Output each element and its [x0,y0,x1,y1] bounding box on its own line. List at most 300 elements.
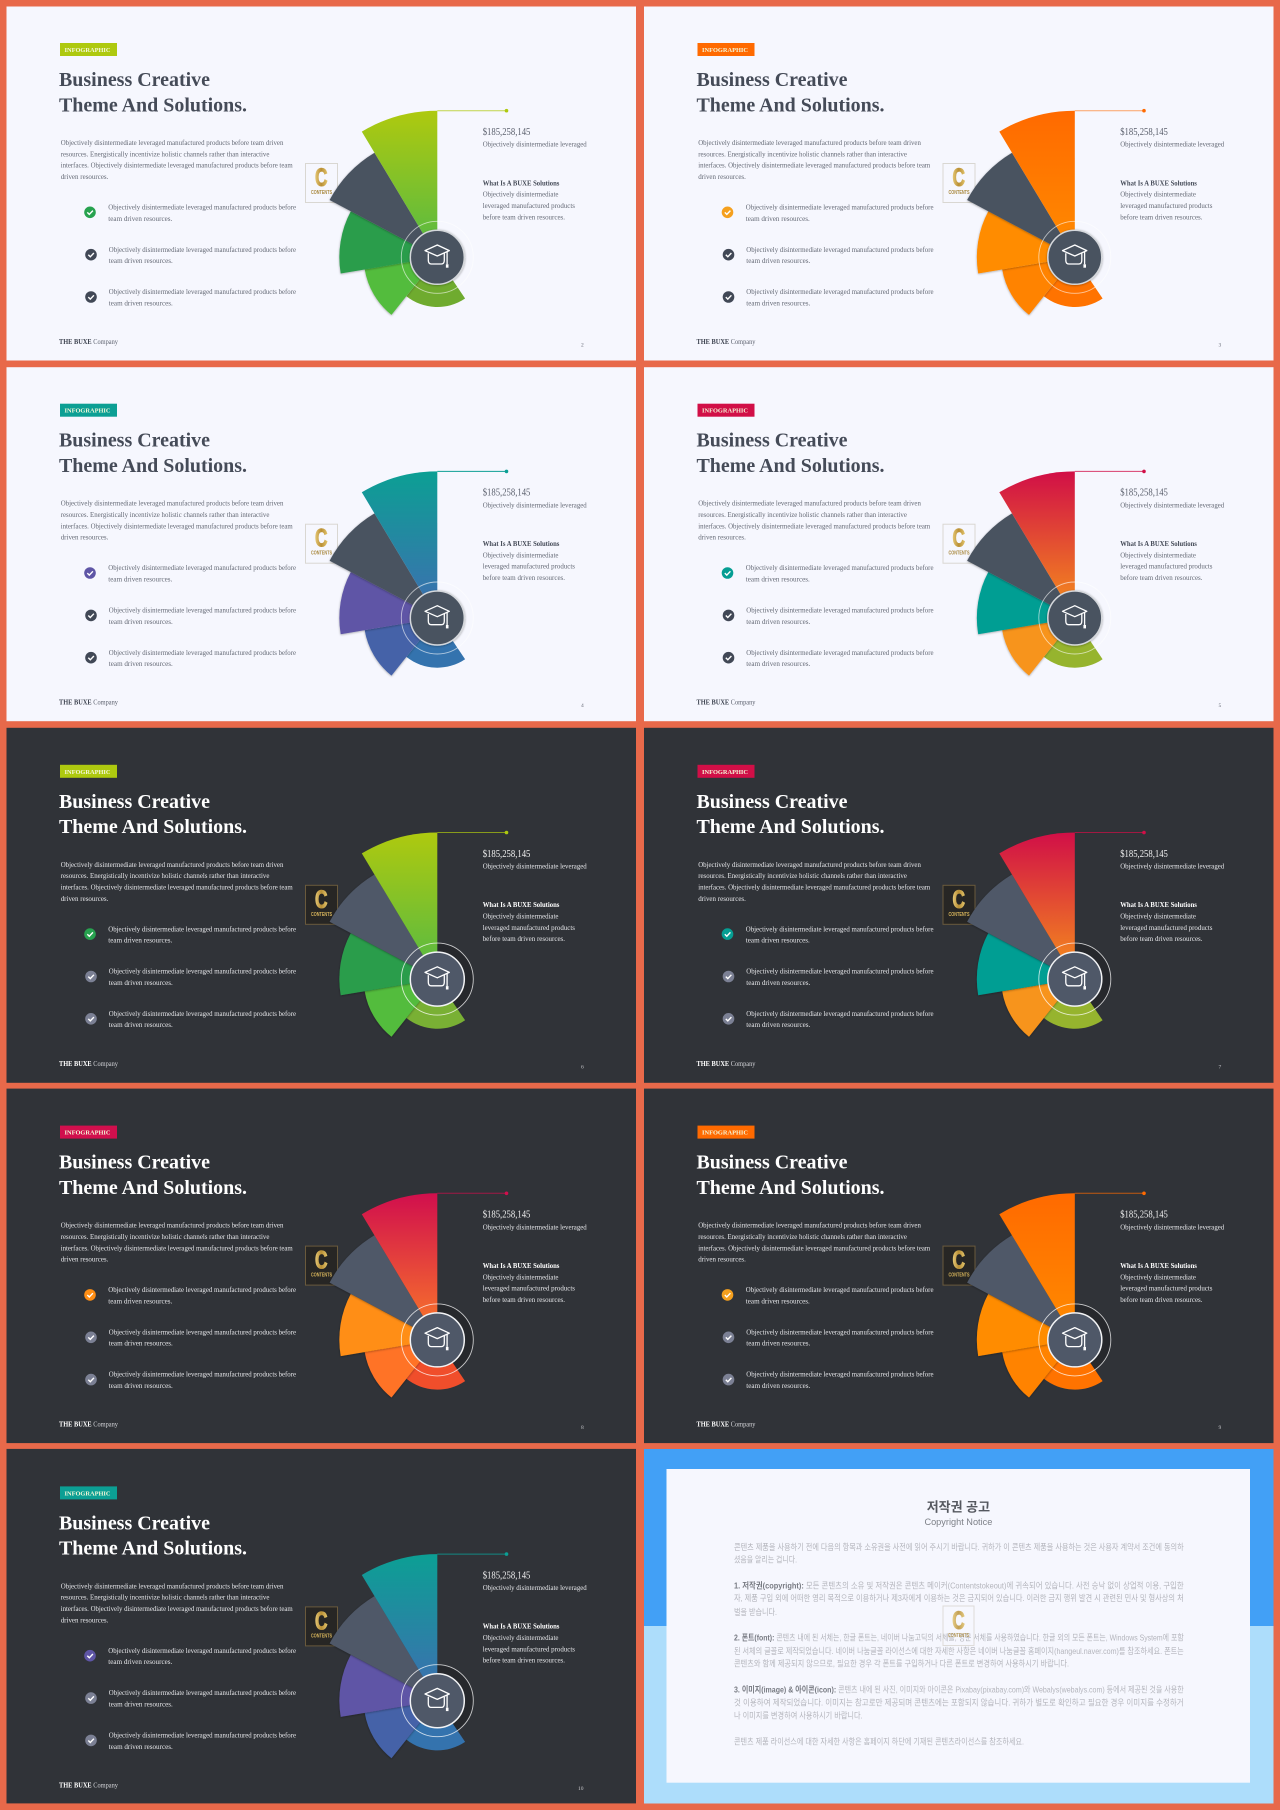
list item 3: Objectively disintermediate leveraged manufactured products before [109,1009,297,1018]
title [696,430,884,477]
chart: radial sectors [330,832,473,1037]
notice section 1: 벌을 받습니다. [734,1607,777,1617]
right stats: Objectively disintermediate leveraged [483,861,587,870]
title: Business Creative [59,1152,210,1174]
paragraph [61,1221,293,1264]
footer: THE BUXE Company [59,338,118,346]
badge [60,1486,117,1499]
list item 2: team driven resources. [746,256,810,265]
right stats: What Is A BUXE Solutions [483,900,559,909]
list item 3: Objectively disintermediate leveraged manufactured products before [109,287,297,296]
page number: 10 [578,1786,584,1792]
paragraph: interfaces. Objectively disintermediate leveraged manufactured products before team [698,161,930,170]
title: Business Creative [696,1152,848,1174]
paragraph [61,138,293,181]
title [59,430,247,477]
list item 3: team driven resources. [109,1381,173,1390]
notice section 3 [734,1683,1184,1720]
page number: 3 [1218,342,1222,348]
logo [306,164,338,202]
list item 2: Objectively disintermediate leveraged manufactured products before [109,967,297,976]
right stats: leveraged manufactured products [1120,562,1213,571]
title [696,1152,884,1199]
right stats: What Is A BUXE Solutions [1120,1261,1197,1270]
right stats: Objectively disintermediate [1120,1272,1196,1281]
paragraph: driven resources. [698,1255,746,1264]
logo: C [315,1247,328,1275]
paragraph: driven resources. [61,894,108,903]
list item 1: Objectively disintermediate leveraged manufactured products before [746,202,934,212]
chart: radial sectors [330,1193,473,1398]
paragraph: interfaces. Objectively disintermediate leveraged manufactured products before team [698,882,930,891]
list item 3 [723,287,934,307]
logo: C [952,886,965,914]
right stats: before team driven resources. [483,934,565,943]
right stats: before team driven resources. [1120,212,1203,221]
panel: slide 5 red light [644,367,1274,721]
list item 2: team driven resources. [746,978,810,987]
paragraph [698,860,930,903]
right stats: leveraged manufactured products [483,562,575,571]
logo: C [315,525,328,553]
badge: INFOGRAPHIC [702,769,748,776]
page number: 4 [581,703,584,709]
list item 2: team driven resources. [109,1339,173,1348]
paragraph: driven resources. [61,1255,108,1264]
paragraph [61,1581,293,1624]
notice title: Copyright Notice [924,1517,992,1527]
right stats: Objectively disintermediate [1120,911,1196,920]
list item 1: team driven resources. [746,575,810,584]
paragraph: resources. Energistically incentivize holistic channels rather than interactive [698,871,907,880]
panel: slide 4 teal light [6,367,636,721]
notice section 2 [734,1632,1184,1669]
badge: INFOGRAPHIC [702,408,748,415]
list item 3 [723,1009,934,1029]
title: Business Creative [59,791,210,813]
arrow line [1075,831,1146,834]
page number: 7 [1218,1064,1222,1070]
list item 1: Objectively disintermediate leveraged manufactured products before [108,1646,297,1655]
notice title [924,1500,992,1527]
notice section 2: 2. 폰트(font): 콘텐츠 내에 된 서체는, 한글 폰트는, 네이버 나눔고딕의 서체를, 영문 서체를 사용하였습니다. 한글 외의 모든 폰트는, Windows System에 포함 [734,1632,1184,1643]
right stats: What Is A BUXE Solutions [1120,900,1197,909]
logo: C [315,164,328,192]
logo: CONTENTS [948,1273,970,1279]
badge: INFOGRAPHIC [702,47,748,54]
logo [306,1607,338,1646]
footer: THE BUXE Company [59,1421,118,1429]
title: Business Creative [59,1512,210,1534]
paragraph: driven resources. [61,533,108,542]
chart: radial sectors [967,832,1111,1037]
logo [943,885,975,924]
footer: THE BUXE Company [696,699,756,707]
right stats: What Is A BUXE Solutions [483,1622,559,1631]
logo: CONTENTS [311,190,333,196]
badge [698,43,754,56]
arrow line [437,831,508,834]
badge: INFOGRAPHIC [64,1130,111,1137]
list item 3: Objectively disintermediate leveraged manufactured products before [109,648,297,657]
right stats: Objectively disintermediate leveraged [483,140,587,149]
right stats [483,488,587,582]
list item 2: team driven resources. [109,617,173,626]
page number: 2 [581,342,584,348]
right stats: $185,258,145 [1120,849,1168,860]
list item 1: team driven resources. [108,214,172,223]
badge [60,43,117,56]
list item 3: team driven resources. [746,659,810,668]
right stats: What Is A BUXE Solutions [1120,539,1197,548]
list item 2: team driven resources. [109,978,173,987]
list item 3: Objectively disintermediate leveraged manufactured products before [746,287,934,296]
badge [60,1126,117,1139]
right stats: Objectively disintermediate [483,1272,559,1281]
list item 3 [85,1009,297,1029]
paragraph [61,860,293,903]
list item 1 [722,202,934,223]
chart: radial sectors [967,111,1111,315]
right stats [483,1570,587,1665]
right stats: before team driven resources. [483,1656,565,1665]
logo [943,524,975,563]
logo watermark [943,1606,974,1646]
panel: slide 6 green dark [6,728,636,1083]
right stats: Objectively disintermediate [483,190,559,199]
panel: slide 3 orange light [644,6,1274,360]
list item 2: Objectively disintermediate leveraged manufactured products before [109,245,297,254]
paragraph: resources. Energistically incentivize holistic channels rather than interactive [698,1232,907,1241]
right stats: leveraged manufactured products [1120,1284,1213,1293]
paragraph: resources. Energistically incentivize holistic channels rather than interactive [61,871,270,880]
notice section 1: 자, 제품 구입 외에 어떠한 영리 목적으로 이용하거나 제3자에게 이용하는 것은 금지되어 있습니다. 이러한 금지 행위 발견 시 관련된 민사 및 형사상의 처 [734,1592,1184,1603]
notice section 1 [734,1579,1184,1617]
list item 3: team driven resources. [746,1020,810,1029]
list item 1 [722,924,934,945]
list item 1: team driven resources. [108,1296,172,1305]
list item 2 [85,245,297,265]
page number: 5 [1218,703,1222,709]
list item 3 [85,1370,297,1390]
paragraph: driven resources. [698,533,746,542]
paragraph: Objectively disintermediate leveraged manufactured products before team driven [61,860,284,869]
arrow line [1075,109,1146,112]
title: Theme And Solutions. [696,816,884,838]
list item 2 [723,606,934,626]
arrow line [1075,1192,1146,1195]
list item 3 [723,648,934,668]
right stats [1120,127,1224,221]
paragraph: resources. Energistically incentivize holistic channels rather than interactive [698,149,907,158]
list item 1: team driven resources. [746,936,810,945]
title [696,69,884,116]
panel: copyright notice [644,1449,1274,1804]
arrow line [437,1192,508,1195]
list item 3: team driven resources. [109,659,173,668]
list item 1: Objectively disintermediate leveraged manufactured products before [108,924,297,933]
paragraph: driven resources. [698,894,746,903]
right stats: Objectively disintermediate leveraged [1120,500,1224,509]
paragraph: Objectively disintermediate leveraged manufactured products before team driven [698,1221,921,1230]
list item 2: team driven resources. [109,1700,173,1709]
badge [60,765,117,778]
list item 2: Objectively disintermediate leveraged manufactured products before [109,1688,297,1697]
logo: CONTENTS [311,551,333,557]
title: Theme And Solutions. [59,94,247,116]
list item 1: Objectively disintermediate leveraged manufactured products before [746,1285,934,1294]
badge: INFOGRAPHIC [64,1490,111,1497]
logo: C [952,164,965,192]
paragraph: interfaces. Objectively disintermediate leveraged manufactured products before team [61,521,293,530]
right stats: leveraged manufactured products [483,1644,575,1653]
right stats: $185,258,145 [1120,488,1168,499]
list item 3: Objectively disintermediate leveraged manufactured products before [746,1370,934,1379]
right stats: before team driven resources. [1120,573,1203,582]
arrow line [1075,470,1146,473]
list item 3: team driven resources. [746,1381,810,1390]
title: Business Creative [696,430,848,452]
notice intro [734,1541,1184,1565]
paragraph: driven resources. [61,1615,108,1624]
notice intro: 셨음을 알리는 겁니다. [734,1554,797,1565]
logo [943,164,975,202]
list item 3: Objectively disintermediate leveraged manufactured products before [109,1731,297,1740]
footer: THE BUXE Company [59,699,118,707]
list item 1 [722,563,934,584]
right stats: $185,258,145 [1120,1210,1168,1221]
right stats: leveraged manufactured products [483,201,575,210]
paragraph: interfaces. Objectively disintermediate leveraged manufactured products before team [61,1243,293,1252]
right stats [483,127,587,221]
paragraph: driven resources. [61,172,108,181]
paragraph: resources. Energistically incentivize holistic channels rather than interactive [61,1593,270,1602]
page number: 6 [581,1064,584,1070]
right stats: $185,258,145 [483,127,530,138]
footer: THE BUXE Company [696,338,756,346]
paragraph: interfaces. Objectively disintermediate leveraged manufactured products before team [698,521,930,530]
title [59,1152,247,1199]
paragraph: interfaces. Objectively disintermediate leveraged manufactured products before team [698,1243,930,1252]
title [696,791,884,838]
badge: INFOGRAPHIC [702,1130,748,1137]
right stats: Objectively disintermediate leveraged [483,1583,587,1592]
title: Theme And Solutions. [696,94,884,116]
title: Business Creative [696,69,848,91]
logo [306,524,338,563]
right stats: before team driven resources. [483,573,565,582]
panel: slide 2 green light [6,6,636,360]
list item 3: Objectively disintermediate leveraged manufactured products before [109,1370,297,1379]
badge: INFOGRAPHIC [64,408,111,415]
right stats: Objectively disintermediate leveraged [483,500,587,509]
badge [60,404,117,417]
footer: THE BUXE Company [59,1781,118,1789]
notice section 3: 3. 이미지(image) & 아이콘(icon): 콘텐츠 내에 된 사진, 이미지와 아이콘은 Pixabay(pixabay.com)와 Webalys(webalys.com) 등에서 제공된 것을 사용한 [734,1683,1184,1694]
right stats: Objectively disintermediate [483,1633,559,1642]
title: Business Creative [59,430,210,452]
page number: 8 [581,1425,584,1431]
badge: INFOGRAPHIC [64,47,111,54]
notice intro: 콘텐츠 제품을 사용하기 전에 다음의 항목과 소유권을 사전에 읽어 주시기 바랍니다. 귀하가 이 콘텐츠 제품을 사용하는 것은 사용자 계약서 조건에 동의하 [734,1541,1184,1552]
badge: INFOGRAPHIC [64,769,111,776]
list item 1: team driven resources. [108,1657,172,1666]
list item 1: Objectively disintermediate leveraged manufactured products before [108,1285,297,1294]
list item 2: team driven resources. [746,617,810,626]
panel: slide 9 orange dark [644,1089,1274,1443]
paragraph: resources. Energistically incentivize holistic channels rather than interactive [61,510,270,519]
list item 2 [85,1327,297,1348]
paragraph [698,138,930,181]
footer: THE BUXE Company [59,1060,118,1068]
panel: slide 10 teal dark [6,1449,636,1803]
logo: CONTENTS [311,1633,333,1639]
list item 3: team driven resources. [109,1742,173,1751]
right stats: Objectively disintermediate [1120,190,1196,199]
right stats: Objectively disintermediate leveraged [1120,861,1224,870]
right stats: Objectively disintermediate [1120,550,1196,559]
paragraph: resources. Energistically incentivize holistic channels rather than interactive [61,149,270,158]
list item 1: team driven resources. [746,214,810,223]
chart: radial sectors [330,1554,473,1758]
footer: THE BUXE Company [696,1421,756,1429]
list item 1 [722,1285,934,1305]
title [59,1512,247,1560]
list item 2: Objectively disintermediate leveraged manufactured products before [746,606,934,615]
logo [306,1246,338,1285]
list item 3: Objectively disintermediate leveraged manufactured products before [746,1009,934,1018]
list item 3: team driven resources. [109,298,173,307]
list item 2: team driven resources. [746,1339,810,1348]
paragraph: interfaces. Objectively disintermediate leveraged manufactured products before team [61,1604,293,1613]
logo [306,885,338,924]
list item 3 [85,1730,297,1751]
chart: radial sectors [967,1193,1111,1398]
paragraph: resources. Energistically incentivize holistic channels rather than interactive [698,510,907,519]
list item 1 [84,202,297,223]
paragraph [698,499,930,542]
title [59,69,247,116]
right stats: What Is A BUXE Solutions [483,178,559,187]
right stats: What Is A BUXE Solutions [483,1261,559,1270]
badge [698,1126,754,1139]
right stats: What Is A BUXE Solutions [483,539,559,548]
right stats: Objectively disintermediate leveraged [483,1222,587,1231]
arrow line [437,470,508,473]
logo: C [315,886,328,914]
paragraph: interfaces. Objectively disintermediate leveraged manufactured products before team [61,161,293,170]
arrow line [437,109,508,112]
panel: slide 7 red dark [644,728,1274,1083]
paragraph: driven resources. [698,172,746,181]
list item 2: Objectively disintermediate leveraged manufactured products before [746,967,934,976]
list item 1 [84,563,297,584]
notice title: 저작권 공고 [927,1500,990,1515]
list item 2 [723,1327,934,1348]
right stats: $185,258,145 [483,1570,530,1581]
list item 1 [84,1285,297,1305]
right stats [483,849,587,943]
list item 3: team driven resources. [746,298,810,307]
list item 1: team driven resources. [108,936,172,945]
page number: 9 [1218,1425,1222,1431]
list item 1 [84,1646,297,1666]
list item 1 [84,924,297,945]
right stats [1120,849,1224,943]
right stats: What Is A BUXE Solutions [1120,178,1197,187]
list item 3 [85,287,297,307]
chart: radial sectors [330,111,473,315]
right stats: $185,258,145 [483,1210,530,1221]
list item 1: Objectively disintermediate leveraged manufactured products before [746,924,934,933]
paragraph [698,1221,930,1264]
list item 3: team driven resources. [109,1020,173,1029]
right stats: leveraged manufactured products [483,1284,575,1293]
right stats: Objectively disintermediate [483,550,559,559]
right stats: leveraged manufactured products [1120,201,1213,210]
title: Business Creative [59,69,210,91]
paragraph: Objectively disintermediate leveraged manufactured products before team driven [698,499,921,508]
right stats: before team driven resources. [483,1295,565,1304]
title: Theme And Solutions. [696,1177,884,1199]
logo watermark: CONTENTS [948,1633,970,1639]
right stats: Objectively disintermediate leveraged [1120,1222,1224,1231]
list item 2 [723,967,934,987]
logo: CONTENTS [311,1273,333,1279]
notice closing: 콘텐츠 제품 라이선스에 대한 자세한 사항은 홈페이지 하단에 기재된 콘텐츠라이선스를 참조하세요. [734,1735,1024,1746]
list item 2: Objectively disintermediate leveraged manufactured products before [746,1327,934,1336]
notice section 2: 콘텐츠와 함께 제공되지 않으므로, 필요한 경우 각 폰트를 구입하거나 다른 폰트로 변경하여 사용하시기 바랍니다. [734,1658,1069,1669]
title: Business Creative [696,791,848,813]
paragraph [61,499,293,542]
logo: CONTENTS [311,912,333,918]
badge [698,765,754,778]
right stats: before team driven resources. [483,212,565,221]
right stats: Objectively disintermediate leveraged [1120,140,1224,149]
paragraph: Objectively disintermediate leveraged manufactured products before team driven [61,138,284,147]
list item 1: team driven resources. [108,575,172,584]
right stats: $185,258,145 [483,849,530,860]
right stats [1120,1210,1224,1304]
logo: C [952,1247,965,1275]
logo: C [315,1607,328,1635]
list item 1: team driven resources. [746,1296,810,1305]
right stats: leveraged manufactured products [1120,923,1213,932]
notice section 1: 1. 저작권(copyright): 모든 콘텐츠의 소유 및 저작권은 콘텐츠 메이커(Contentstokeout)에 귀속되어 있습니다. 사전 승낙 없이 상업적 이용, 구입한 [734,1579,1184,1590]
right stats: $185,258,145 [1120,127,1168,138]
list item 2: Objectively disintermediate leveraged manufactured products before [746,245,934,254]
right stats: before team driven resources. [1120,934,1203,943]
list item 2: Objectively disintermediate leveraged manufactured products before [109,606,297,615]
title [59,791,247,838]
badge [698,404,754,417]
list item 1: Objectively disintermediate leveraged manufactured products before [108,563,297,572]
logo [943,1246,975,1285]
right stats [1120,488,1224,582]
notice section 3: 것 이용하여 제작되었습니다. 이미지는 참고로만 제공되며 콘텐츠에는 포함되지 않습니다. 귀하가 별도로 확인하고 필요한 경우 이미지를 수정하거 [734,1697,1184,1708]
panel: slide 8 sunset dark [6,1089,636,1443]
list item 2 [85,967,297,987]
logo: CONTENTS [948,190,970,196]
list item 2 [85,1688,297,1708]
chart: radial sectors [967,471,1111,676]
paragraph: Objectively disintermediate leveraged manufactured products before team driven [698,138,921,147]
right stats: Objectively disintermediate [483,911,559,920]
list item 2: Objectively disintermediate leveraged manufactured products before [109,1327,297,1336]
title: Theme And Solutions. [696,455,884,477]
title: Theme And Solutions. [59,816,247,838]
paragraph: interfaces. Objectively disintermediate leveraged manufactured products before team [61,882,293,891]
